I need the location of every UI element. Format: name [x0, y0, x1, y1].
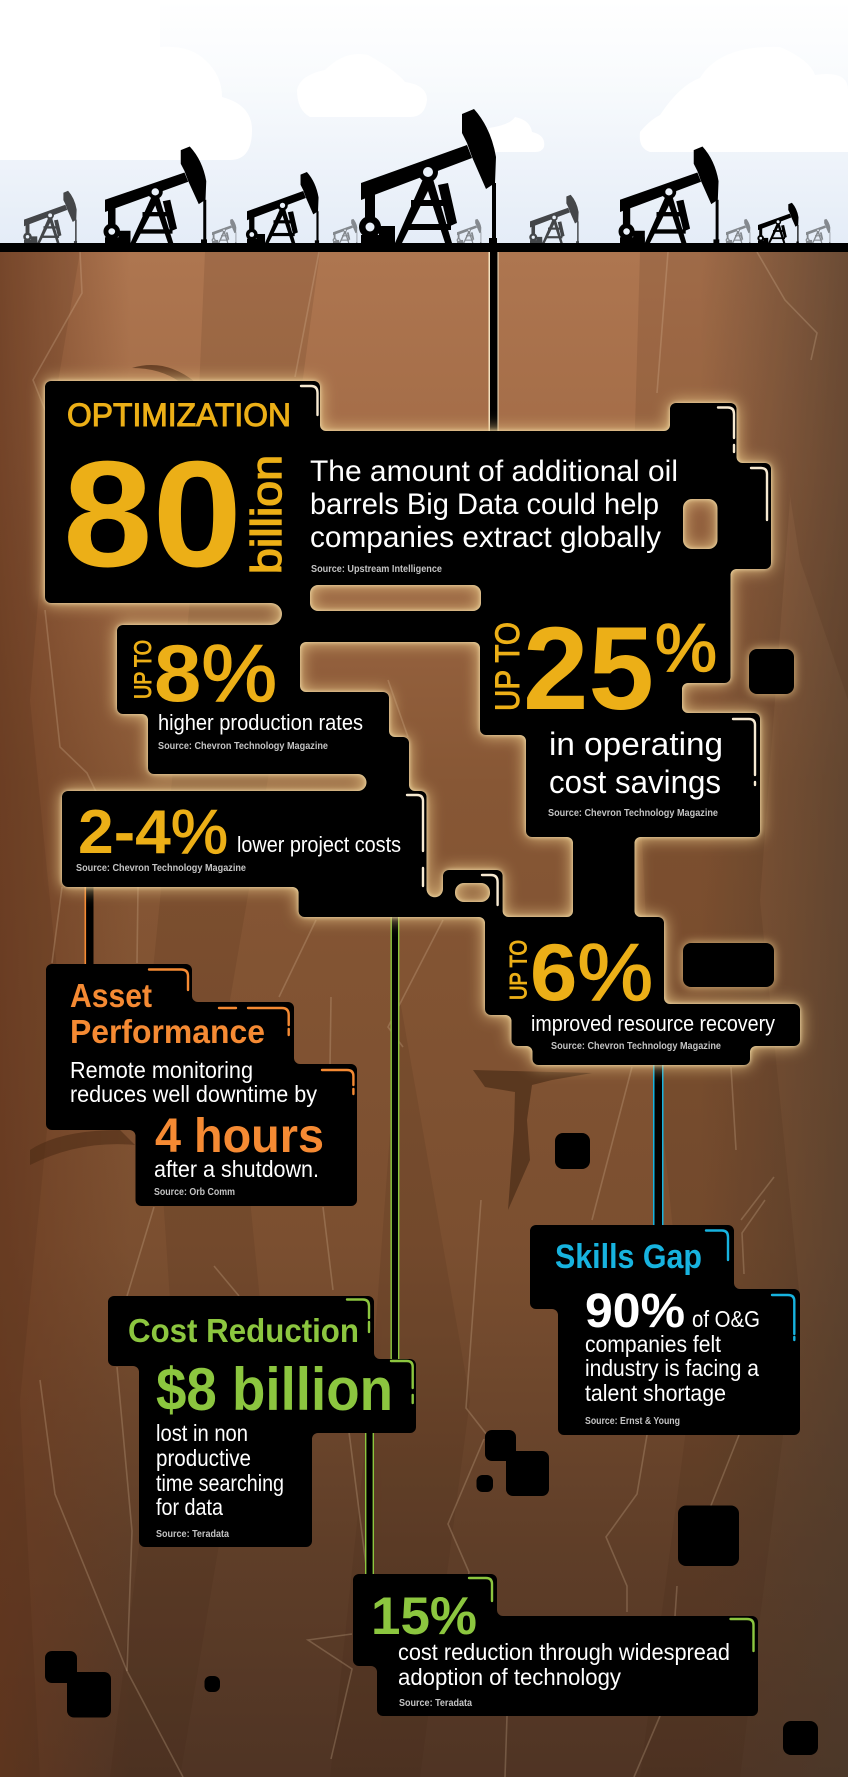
text: cost reduction through technology: adoption of technology	[398, 1664, 621, 1690]
text: talent shortage	[585, 1331, 759, 1406]
stat: up to 6 percent: UP TO	[506, 940, 532, 1000]
heading: optimization: OPTIMIZATION	[67, 397, 291, 433]
clouds	[0, 0, 848, 160]
stat: up to 8 percent: Source: Chevron Technology Magazine	[158, 740, 328, 752]
stat: up to 25 percent: cost savings	[549, 764, 721, 800]
sky background	[0, 0, 848, 246]
stat: 15 percent value: 15%	[371, 1587, 477, 1646]
stat: 80 billion: billion	[243, 455, 291, 574]
source: teradata: Source: Teradata	[156, 1528, 229, 1540]
pipe: green to 15 percent	[365, 1432, 374, 1575]
stat: 2-4 percent: Source: Chevron Technology Magazine	[76, 862, 246, 874]
pipe: green to cost reduction	[390, 916, 399, 1360]
text: lost time: time searching	[156, 1470, 284, 1496]
text: remote monitoring: Remote monitoring	[70, 1057, 253, 1083]
text: lost time: for data	[156, 1494, 223, 1520]
text: optimization description: The amount of additional oil	[310, 455, 678, 488]
text: remote monitoring	[70, 1057, 317, 1107]
stat: up to 8 percent: UP TO	[130, 640, 157, 699]
pumpjack silhouettes	[23, 109, 830, 243]
panel shape	[530, 1225, 800, 1435]
stat: up to 25 percent: in operating	[549, 726, 723, 762]
text: optimization description	[310, 455, 678, 554]
text: after a shutdown: after a shutdown.	[154, 1156, 319, 1182]
text: talent shortage: companies felt	[585, 1331, 722, 1357]
stat: 2-4 percent: 2-4%	[78, 798, 228, 867]
text: lost time: lost in non	[156, 1420, 248, 1446]
heading: skills gap: Skills Gap	[555, 1238, 702, 1276]
stat: 90 percent	[585, 1285, 760, 1338]
text: remote monitoring: reduces well downtime by	[70, 1081, 317, 1107]
text: lost time: productive	[156, 1445, 251, 1471]
pipe: blue to skills gap	[653, 1064, 664, 1226]
panel: cost reduction	[108, 1296, 416, 1547]
foreground pumpjacks	[104, 109, 799, 243]
source: teradata: Source: Teradata	[399, 1697, 472, 1709]
text: lost time	[156, 1420, 284, 1520]
stat: up to 6 percent: 6%	[530, 928, 653, 1018]
heading: asset performance	[70, 977, 265, 1050]
heading: asset performance: Performance	[70, 1013, 265, 1050]
stat: 4 hours: 4 hours	[155, 1110, 324, 1163]
panel shape	[108, 1296, 416, 1547]
panel shape	[353, 1574, 758, 1716]
stat: up to 25 percent: %	[655, 610, 717, 686]
stat: up to 6 percent	[506, 928, 775, 1052]
stat: 80 billion: 80	[63, 429, 242, 598]
stat: 90 percent: of O&G	[692, 1306, 760, 1332]
source: orb comm: Source: Orb Comm	[154, 1186, 235, 1198]
corner accents	[347, 1300, 413, 1403]
stat: up to 8 percent: 8%	[154, 629, 277, 719]
stat: 90 percent: 90%	[585, 1285, 685, 1338]
source: upstream intelligence: Source: Upstream Intelligence	[311, 563, 442, 575]
corner accents	[706, 1230, 794, 1340]
stat: up to 8 percent: higher production rates	[158, 710, 363, 735]
text: optimization description: barrels Big Data could help	[310, 488, 659, 521]
panel: asset performance	[46, 964, 357, 1206]
stat: 2-4 percent: lower project costs	[237, 832, 401, 857]
stat: 8 billion dollars: $8 billion	[156, 1356, 393, 1423]
heading: cost reduction: Cost Reduction	[128, 1312, 359, 1349]
text: talent shortage: talent shortage	[585, 1380, 726, 1406]
decorative black blocks	[45, 649, 818, 1755]
heading: asset performance: Asset	[70, 977, 152, 1014]
text: cost reduction through technology: cost reduction through widespread	[398, 1639, 730, 1665]
panel: 15 percent	[353, 1574, 758, 1716]
stat: up to 25 percent: UP TO	[489, 622, 527, 711]
tiny background pumpjacks	[212, 219, 830, 243]
corner accents	[469, 1578, 754, 1651]
source: ernst and young: Source: Ernst & Young	[585, 1415, 680, 1427]
panel shape	[46, 964, 357, 1206]
stat: up to 6 percent: improved resource recovery	[531, 1011, 775, 1036]
panel shape with cut-outs	[45, 381, 800, 1065]
stat: 2-4 percent	[76, 798, 401, 874]
stat: up to 25 percent: Source: Chevron Technology Magazine	[548, 807, 718, 819]
corner accents	[149, 970, 353, 1094]
ground line	[0, 243, 848, 252]
mid-distance grey pumpjacks	[23, 191, 579, 243]
stat: up to 25 percent	[489, 603, 723, 819]
pipe: orange to asset performance	[84, 886, 94, 966]
text: cost reduction through technology	[398, 1639, 730, 1690]
pipe: main well	[488, 252, 498, 432]
panel: skills gap	[530, 1225, 800, 1435]
corner accents	[301, 386, 767, 905]
stat: up to 25 percent: 25	[523, 603, 654, 735]
text: optimization description: companies extract globally	[310, 521, 661, 554]
stat: up to 8 percent	[130, 629, 363, 752]
panel: optimization network	[45, 381, 800, 1065]
stat: up to 6 percent: Source: Chevron Technology Magazine	[551, 1040, 721, 1052]
text: talent shortage: industry is facing a	[585, 1355, 759, 1381]
